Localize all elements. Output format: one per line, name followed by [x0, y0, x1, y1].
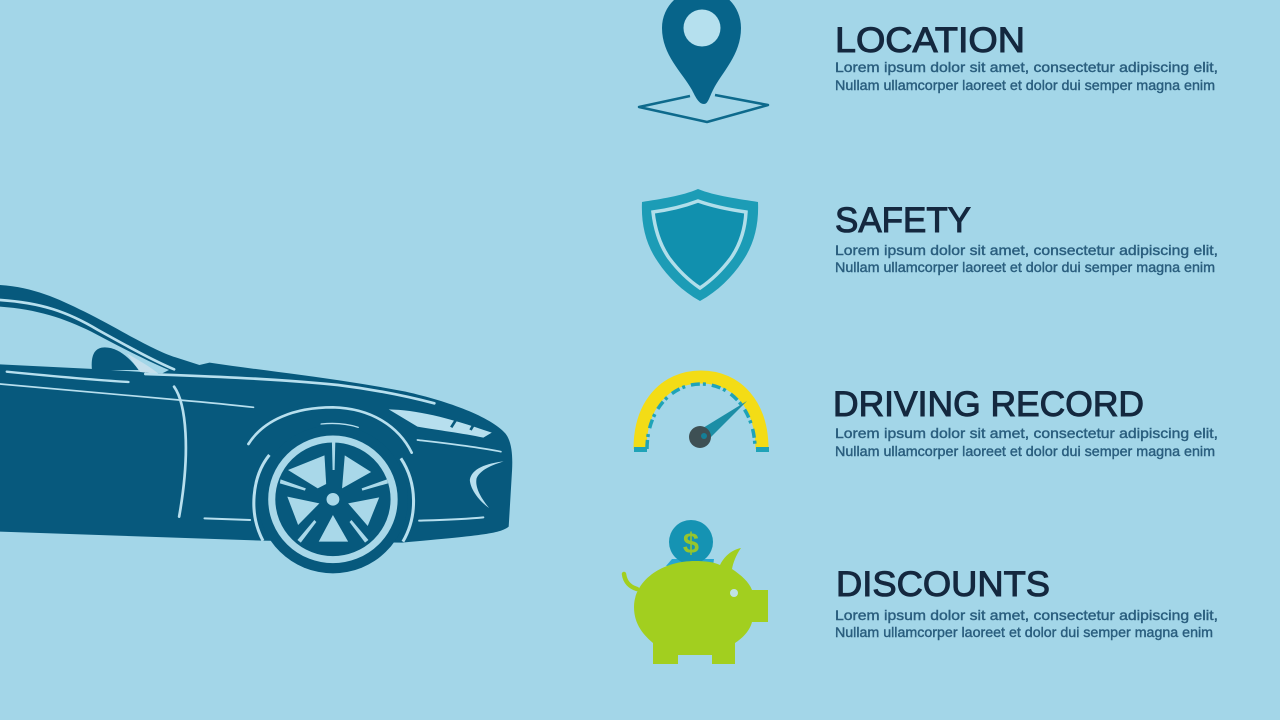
icon: piggy bank with coin	[624, 520, 768, 664]
icon: piggy bank with coin: $	[683, 528, 699, 560]
front wheel	[254, 425, 414, 573]
pig body	[634, 548, 768, 664]
body text: Nullam ullamcorper laoreet et dolor dui semper magna enim	[835, 443, 1215, 459]
icon: safety shield	[642, 189, 758, 301]
body text	[835, 425, 1218, 459]
coin slot	[666, 559, 714, 566]
wheel spokes	[280, 442, 388, 543]
heading: DISCOUNTS	[836, 565, 1050, 604]
pig eye	[730, 589, 738, 597]
block: driving record	[833, 385, 1218, 459]
coin	[669, 520, 713, 564]
block: discounts	[835, 565, 1218, 640]
body text	[835, 242, 1218, 275]
car body	[0, 285, 512, 543]
body text: Lorem ipsum dolor sit amet, consectetur adipiscing elit,	[835, 242, 1218, 258]
side mirror	[92, 347, 139, 370]
body text: Nullam ullamcorper laoreet et dolor dui semper magna enim	[835, 259, 1215, 275]
body text	[835, 607, 1218, 640]
body highlights	[0, 300, 501, 521]
side window	[0, 307, 169, 373]
gauge needle	[698, 401, 747, 442]
block: location	[835, 21, 1218, 93]
heading: DRIVING RECORD	[833, 385, 1144, 424]
body text: Nullam ullamcorper laoreet et dolor dui semper magna enim	[835, 77, 1215, 93]
block: safety	[835, 201, 1218, 275]
body text: Nullam ullamcorper laoreet et dolor dui semper magna enim	[835, 624, 1213, 640]
icon: speedometer gauge	[634, 377, 769, 452]
headlight	[389, 409, 492, 438]
body text: Lorem ipsum dolor sit amet, consectetur adipiscing elit,	[835, 425, 1218, 441]
body text	[835, 59, 1218, 93]
car illustration	[0, 285, 512, 573]
front intake	[470, 461, 504, 508]
body text: Lorem ipsum dolor sit amet, consectetur adipiscing elit,	[835, 59, 1218, 75]
body text: Lorem ipsum dolor sit amet, consectetur adipiscing elit,	[835, 607, 1218, 623]
icon: location pin	[639, 0, 768, 122]
heading: SAFETY	[835, 201, 971, 240]
heading: LOCATION	[835, 21, 1025, 60]
